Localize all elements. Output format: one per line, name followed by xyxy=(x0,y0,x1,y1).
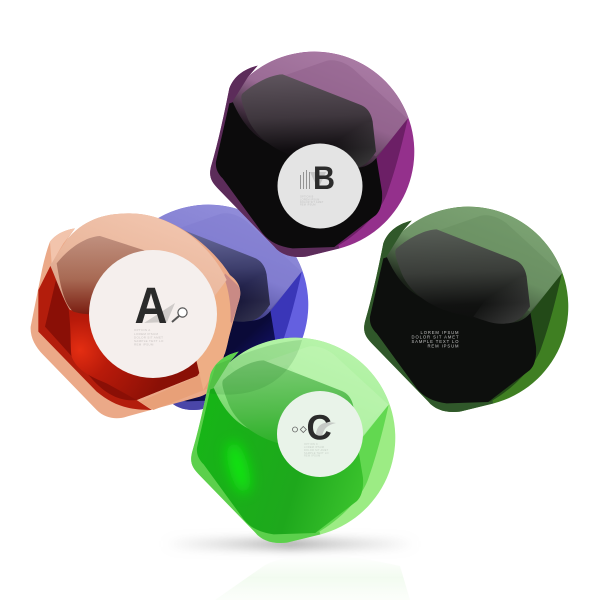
green reflection below bubble C xyxy=(215,555,410,600)
caption: bubble D text: LOREM IPSUM xyxy=(420,330,459,335)
text block C: DOLOR SIT AMET xyxy=(304,449,329,452)
text block B: REM IPSUM xyxy=(300,204,316,207)
top facet xyxy=(50,213,227,317)
mid facet xyxy=(57,236,163,314)
bubble C: bright green xyxy=(191,338,395,543)
icon: grey swoosh behind C xyxy=(316,422,336,438)
text block B: DOLOR SIT AMET xyxy=(300,201,324,204)
caption: bubble D text: DOLOR SIT AMET xyxy=(412,335,459,340)
text block A xyxy=(134,328,164,346)
text block C xyxy=(304,443,329,458)
bubble: blue xyxy=(104,205,308,410)
bubble D: dark green xyxy=(364,207,568,412)
bright red facet xyxy=(68,300,203,400)
pink corner over blue xyxy=(217,273,240,323)
text block A: OPTION A xyxy=(134,328,151,332)
text block C: OPTION C xyxy=(304,443,318,446)
text block B: LOREM IPSUM xyxy=(300,198,320,201)
icon: grey shard behind A xyxy=(144,303,175,323)
caption: bubble D text: REM IPSUM xyxy=(428,343,459,348)
letter C: C xyxy=(306,408,332,448)
panel B: white circle xyxy=(278,144,362,228)
text block C: SAMPLE TEXT LO xyxy=(304,452,329,455)
text block A: REM IPSUM xyxy=(134,342,154,346)
icon: magnifier xyxy=(172,308,187,322)
panel A: white circle xyxy=(89,250,217,378)
panel C: white circle xyxy=(277,391,363,477)
text block C: LOREM IPSUM xyxy=(304,446,324,449)
outer hull xyxy=(31,213,240,418)
bubble A: red and peach xyxy=(31,213,240,418)
upper-left notch highlight xyxy=(50,228,75,263)
right peach strip xyxy=(190,280,231,390)
caption: bubble D text xyxy=(412,330,459,348)
text block B: OPTION B xyxy=(300,196,314,198)
floor shadow xyxy=(165,540,415,548)
lower peach flare xyxy=(140,350,217,410)
icon: vertical bars xyxy=(300,170,310,189)
red layers xyxy=(38,263,217,410)
text block A: LOREM IPSUM xyxy=(134,332,159,336)
icon: circle and diamond xyxy=(292,426,306,432)
text block A: DOLOR SIT AMET xyxy=(134,336,163,340)
text block A: SAMPLE TEXT LO xyxy=(134,339,164,343)
letter A: A xyxy=(134,277,168,334)
text block C: REM IPSUM xyxy=(304,454,320,458)
bright streak xyxy=(223,439,255,496)
letter B: B xyxy=(313,160,335,196)
text block B xyxy=(300,196,324,207)
bubble B: purple xyxy=(210,52,414,257)
icon: grey triangle behind B xyxy=(310,172,326,189)
caption: bubble D text: SAMPLE TEXT LO xyxy=(412,339,459,344)
blue bubble showing through C xyxy=(207,340,302,395)
